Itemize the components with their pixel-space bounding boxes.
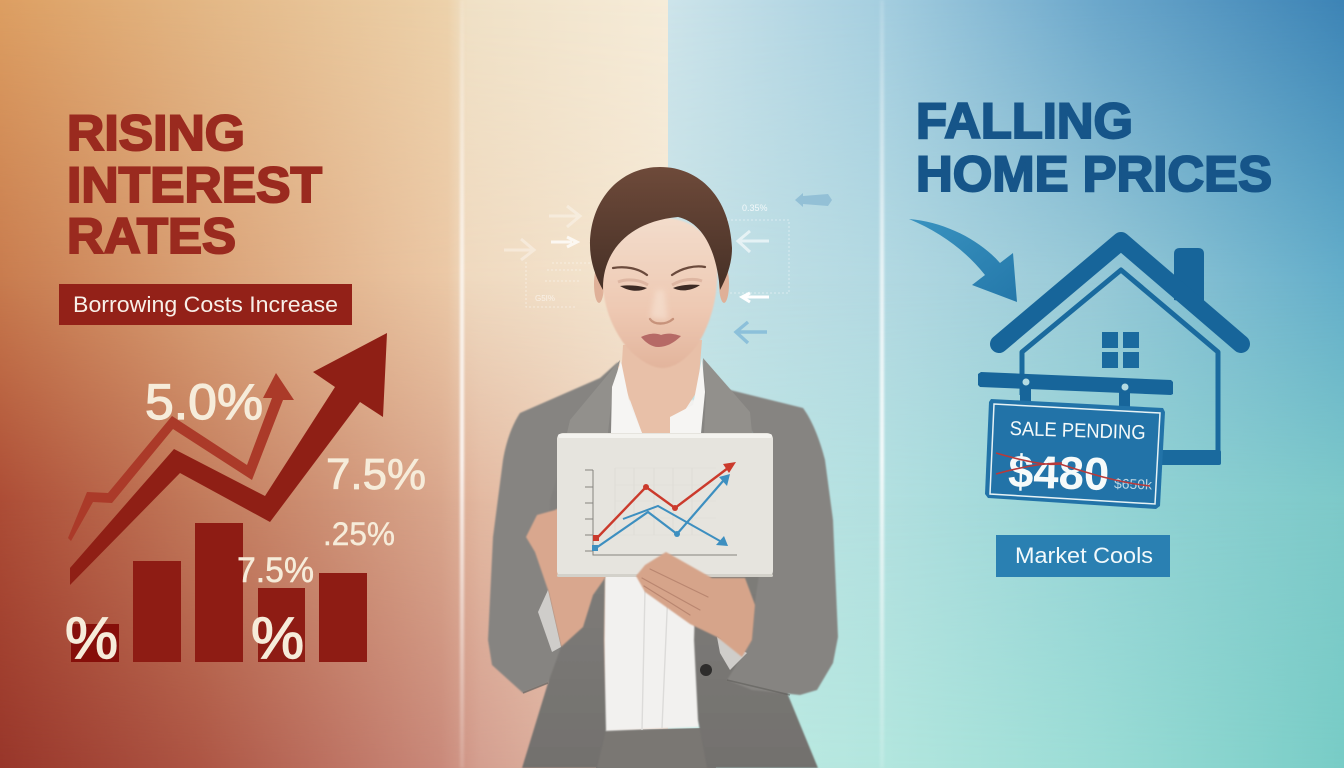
lips	[641, 334, 681, 347]
faint left data overlay: G5I%	[535, 294, 555, 303]
tablet chart blue lines	[592, 474, 730, 551]
title: rising interest rates	[67, 105, 322, 264]
nose	[650, 319, 673, 324]
roof	[999, 241, 1241, 344]
right hand fingers	[642, 569, 708, 615]
shirt placket	[642, 590, 668, 730]
nose shade	[650, 290, 668, 320]
skirt	[596, 728, 716, 768]
title: rising interest rates: RISING	[67, 105, 245, 161]
faint right data overlay	[727, 193, 832, 343]
jacket button	[700, 664, 712, 676]
icon: house with sale sign	[978, 241, 1241, 509]
strike-through lines	[996, 453, 1150, 486]
sale sign text: $650k	[1114, 475, 1153, 492]
tablet chart red line	[593, 462, 736, 541]
panel: right cool background	[668, 0, 1344, 768]
rate labels: 7.5%	[237, 551, 314, 590]
window	[1102, 332, 1139, 368]
rate labels: 5.0%	[145, 374, 263, 430]
left shirt cuff	[538, 590, 561, 652]
jacket lapel shading	[567, 358, 752, 433]
left hand	[526, 505, 605, 647]
title: rising interest rates: INTEREST	[67, 157, 322, 213]
jacket torso	[522, 360, 818, 768]
title: falling home prices: HOME PRICES	[916, 146, 1272, 202]
chimney	[1174, 248, 1204, 305]
title: falling home prices: FALLING	[916, 93, 1133, 149]
tablet	[557, 433, 773, 577]
faint left data overlay	[504, 206, 594, 307]
right hand palm	[636, 552, 755, 657]
faint right data overlay: 0.35%	[742, 203, 768, 213]
icon: large rising arrow	[70, 333, 387, 585]
eyes	[620, 285, 700, 291]
tablet chart axes	[585, 470, 737, 555]
person: analyst reading a tablet	[488, 167, 838, 768]
rate labels: %	[251, 606, 304, 671]
sign hangers	[1020, 380, 1130, 409]
bar chart	[71, 523, 367, 662]
ears	[594, 265, 604, 303]
sign bar	[978, 372, 1173, 395]
rate labels	[65, 374, 426, 671]
jacket right sleeve	[703, 360, 838, 695]
sale sign text	[1007, 418, 1155, 501]
label: market cools: Market Cools	[1015, 543, 1153, 568]
jacket arm seams	[523, 680, 790, 695]
hair	[590, 167, 732, 290]
label: borrowing costs increase	[59, 284, 352, 325]
right shirt cuff	[717, 637, 747, 670]
house base	[1160, 450, 1221, 465]
sale sign text: SALE PENDING	[1009, 418, 1146, 444]
label: market cools	[996, 535, 1170, 577]
eye shadow	[618, 279, 702, 285]
chart: rising rates arrows and bars	[65, 333, 426, 671]
tablet chart grid	[615, 468, 716, 535]
icon: small rising arrow	[68, 373, 294, 541]
jacket left sleeve	[488, 362, 618, 693]
neck	[618, 340, 702, 433]
panel: left warm background	[0, 0, 668, 768]
rate labels: .25%	[323, 516, 395, 552]
brows	[613, 266, 705, 275]
title: rising interest rates: RATES	[67, 208, 236, 264]
collar	[611, 358, 705, 433]
sale sign	[985, 399, 1165, 509]
sale sign text: $480	[1007, 445, 1110, 500]
shirt	[604, 400, 700, 731]
rate labels: %	[65, 606, 118, 671]
face	[603, 218, 717, 368]
rate labels: 7.5%	[326, 450, 426, 499]
house outline	[1022, 270, 1218, 457]
title: falling home prices	[916, 93, 1272, 202]
icon: downward curved arrow	[909, 219, 1017, 302]
label: borrowing costs increase: Borrowing Costs Increase	[73, 292, 338, 317]
